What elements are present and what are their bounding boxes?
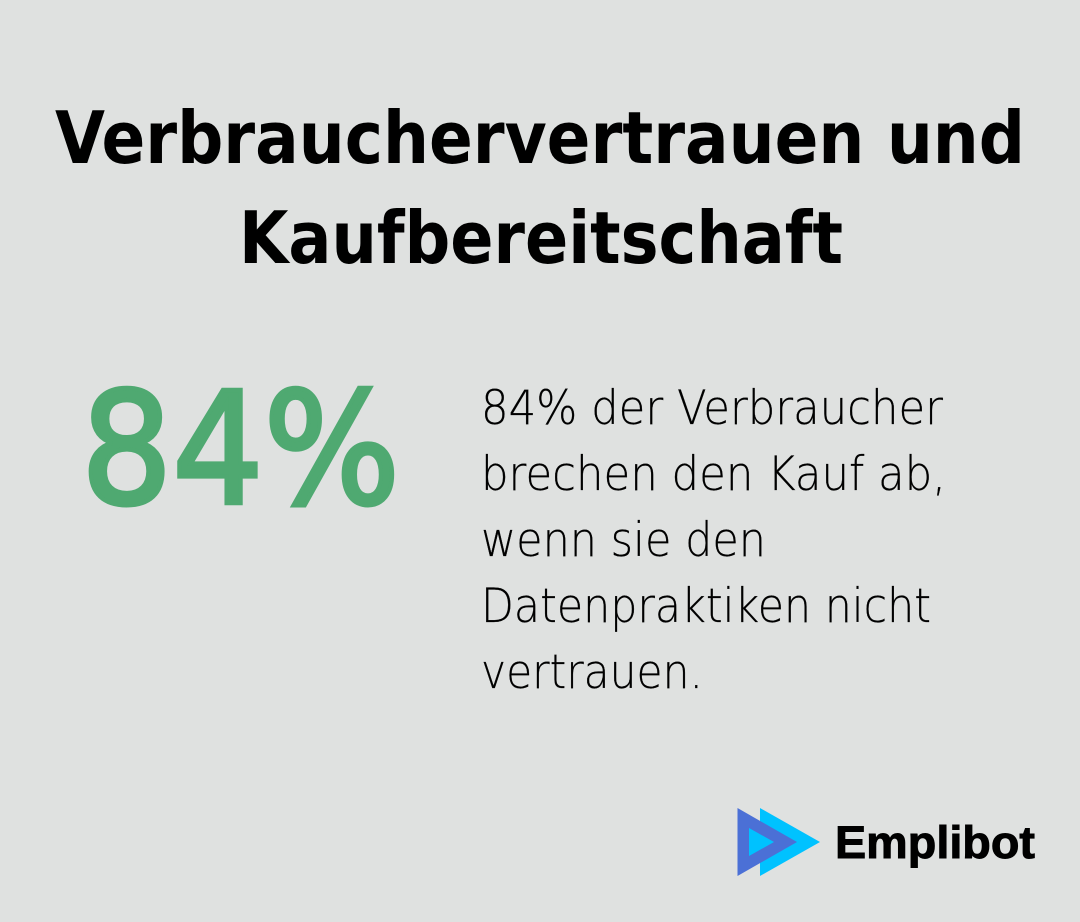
description text <box>481 381 946 700</box>
icon: play triangles <box>738 808 820 876</box>
description text: wenn sie den <box>481 513 766 568</box>
description text: vertrauen. <box>481 645 703 700</box>
big statistic: 84%: 84% <box>81 359 400 540</box>
logo: Emplibot <box>738 808 1035 876</box>
title <box>55 96 1025 280</box>
description text: Datenpraktiken nicht <box>481 579 931 634</box>
description text: brechen den Kauf ab, <box>481 447 946 502</box>
title: Kaufbereitschaft <box>239 196 843 280</box>
logo wordmark: Emplibot <box>835 817 1035 868</box>
description text: 84% der Verbraucher <box>481 381 944 436</box>
